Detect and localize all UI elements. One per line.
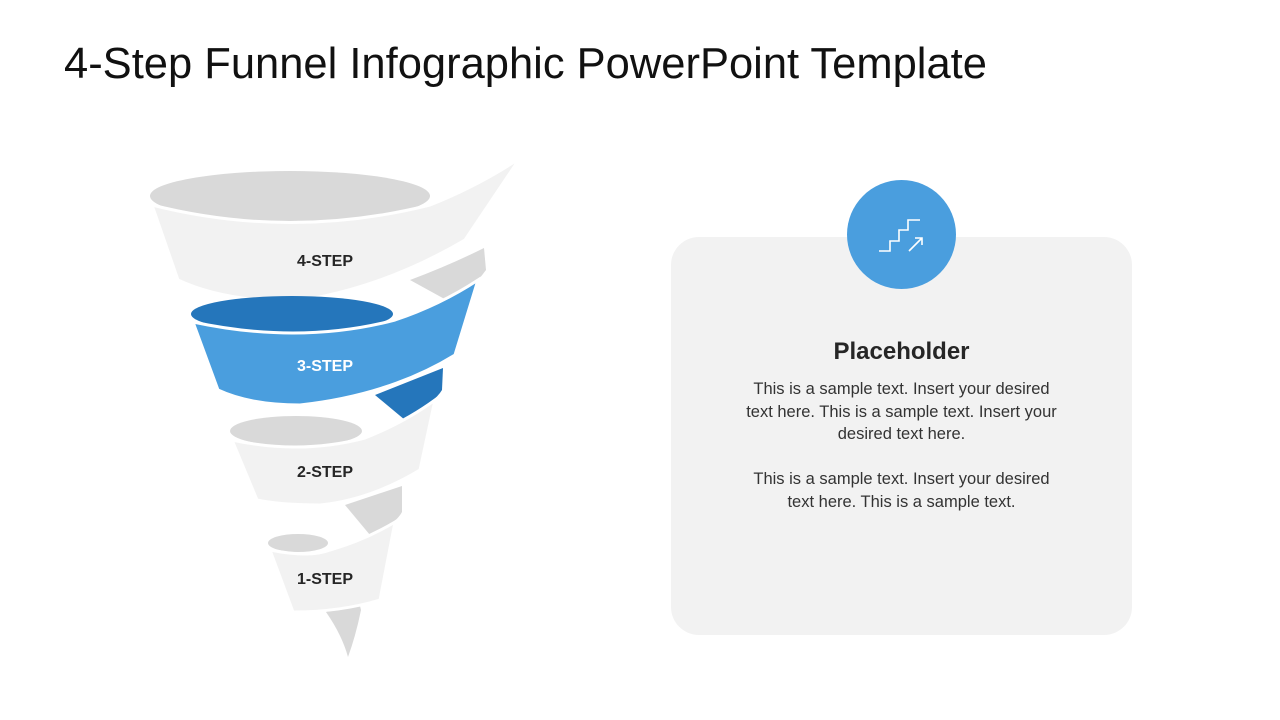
funnel chart	[150, 164, 514, 656]
band: 2-step: 2-STEP	[297, 464, 353, 481]
text block 2: text here. This is a sample text.	[787, 492, 1016, 510]
band: 4-step	[150, 158, 520, 302]
band: 3-step	[191, 280, 478, 420]
text block 1: desired text here.	[838, 425, 965, 443]
panel: content card	[671, 237, 1132, 635]
band: 1-step: 1-STEP	[297, 571, 353, 588]
band: 2-step	[230, 400, 435, 535]
text block 2: This is a sample text. Insert your desired	[753, 470, 1050, 488]
heading: placeholder: Placeholder	[833, 338, 970, 365]
icon: stairs circle	[847, 180, 956, 289]
text block 1: text here. This is a sample text. Insert your	[746, 402, 1057, 420]
text block 2	[753, 470, 1050, 510]
text block 1: This is a sample text. Insert your desired	[753, 380, 1050, 398]
band: 4-step: 4-STEP	[297, 253, 353, 270]
band: 1-step	[268, 522, 395, 657]
title: 4-Step Funnel Infographic PowerPoint Template	[64, 40, 987, 88]
band: 3-step: 3-STEP	[297, 358, 353, 375]
text block 1	[746, 380, 1057, 443]
